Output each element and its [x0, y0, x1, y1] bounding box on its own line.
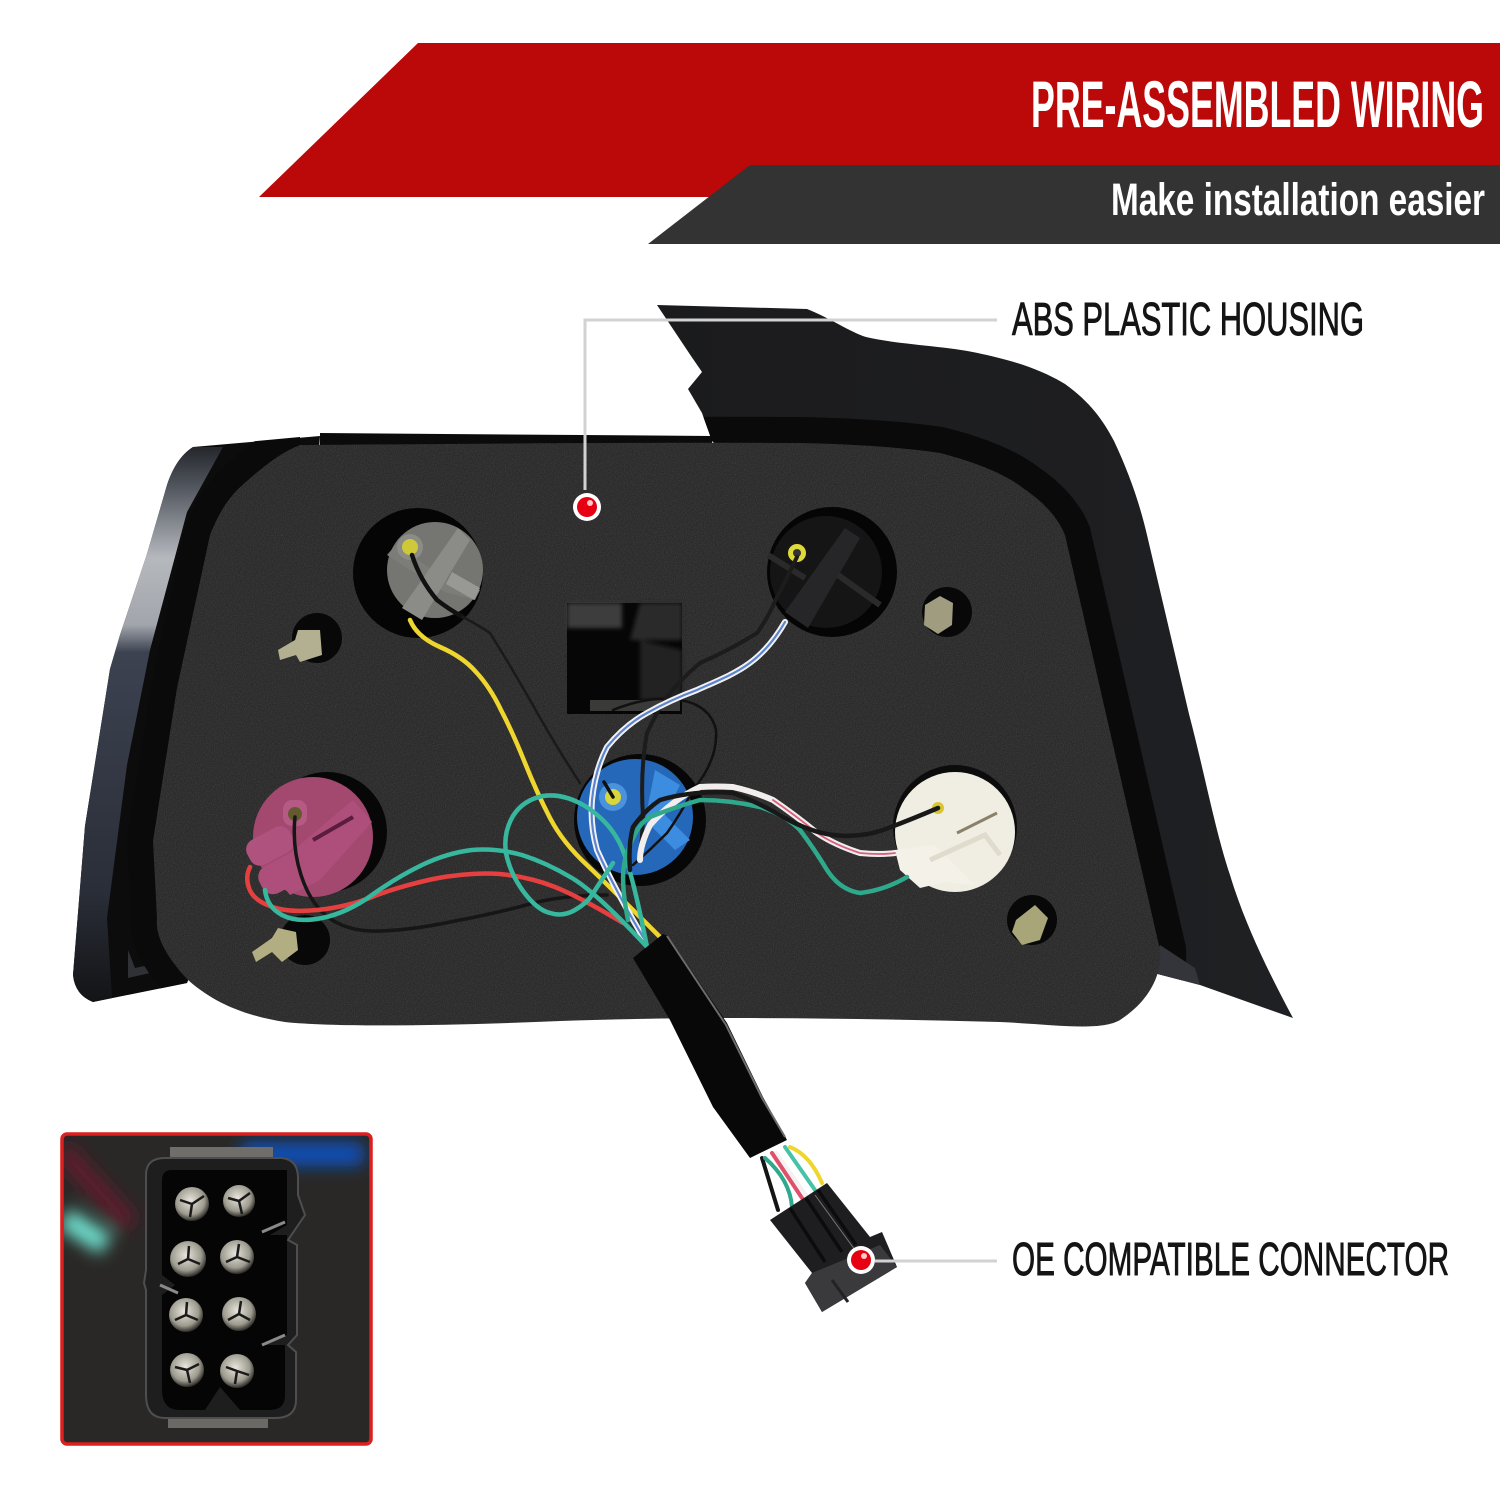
socket: white bulb right [893, 765, 1017, 892]
tail light assembly photo illustration [73, 305, 1293, 1312]
inset: connector close-up [62, 1134, 371, 1444]
connector pins [169, 1185, 256, 1388]
housing: outer black shell [657, 305, 1293, 1018]
connector: wrapped cable [633, 934, 822, 1210]
socket: magenta bulb left [242, 772, 387, 898]
mounting studs [252, 587, 1057, 965]
inset red frame [62, 1134, 371, 1444]
wiring harness [247, 555, 938, 947]
housing: left light band [73, 447, 223, 1002]
callout: oe compatible connector [847, 1233, 1449, 1285]
socket: blue bulb center [574, 754, 706, 886]
banner: red heading ribbon [259, 43, 1500, 197]
blurred background wires [62, 1142, 365, 1245]
marker: connector hotspot [847, 1246, 875, 1274]
gasket: black foam back plate [153, 443, 1160, 1026]
connector face [144, 1147, 305, 1428]
callout: abs plastic housing [573, 293, 1364, 521]
socket: grey bulb top left [353, 508, 483, 638]
marker: housing hotspot [573, 493, 601, 521]
socket: black bulb top right [767, 507, 897, 637]
banner: dark subheading ribbon [648, 165, 1500, 244]
housing: inner recess shadow [153, 443, 1160, 1015]
socket: square opening [567, 603, 682, 714]
connector: plug [770, 1183, 897, 1312]
housing: left lens edge [73, 436, 320, 1002]
